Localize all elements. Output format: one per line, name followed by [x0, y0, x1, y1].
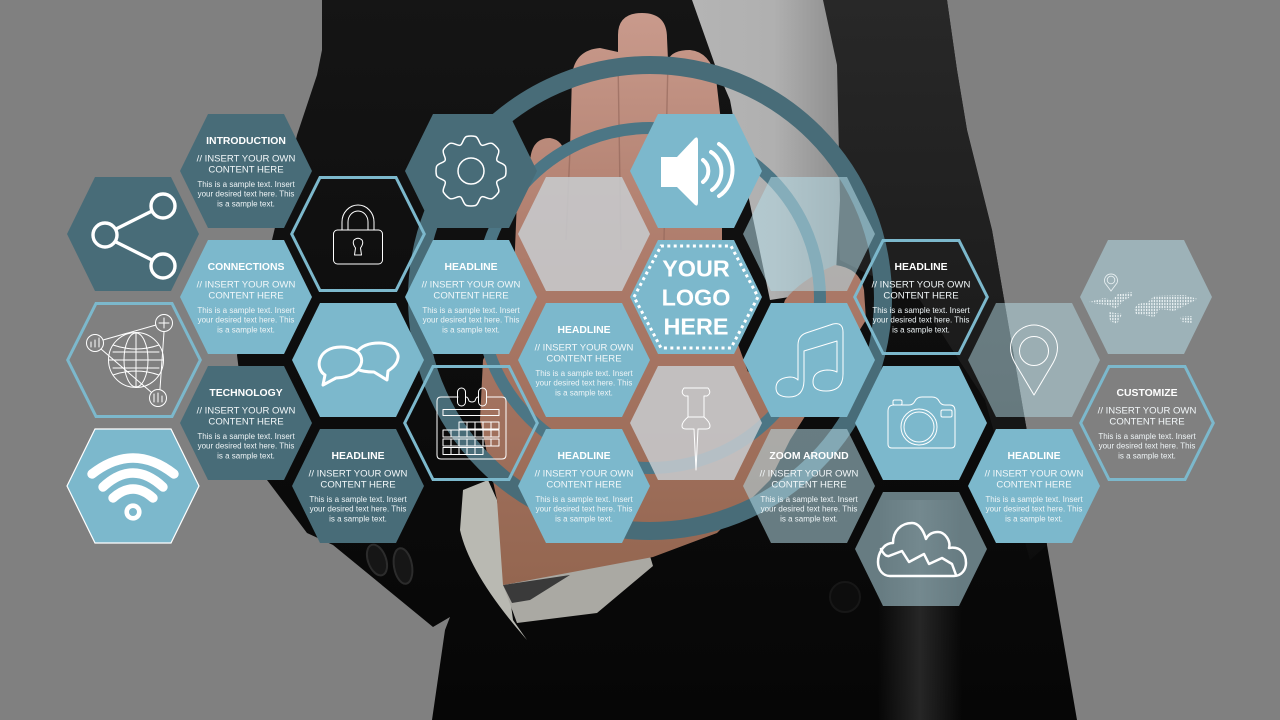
body text: your desired text here. This — [986, 505, 1082, 514]
body text: is a sample text. — [217, 199, 275, 208]
hexagon: headline 6 — [968, 429, 1100, 543]
body text: your desired text here. This — [873, 316, 969, 325]
hexagon: blank translucent left — [518, 177, 650, 291]
subheading: CONTENT HERE — [996, 480, 1072, 490]
body text: your desired text here. This — [536, 505, 632, 514]
hexagon: introduction — [180, 114, 312, 228]
hexagon: headline 4 — [518, 429, 650, 543]
subheading: CONTENT HERE — [883, 290, 959, 302]
body text: your desired text here. This — [198, 442, 294, 451]
body text: This is a sample text. Insert — [309, 495, 407, 504]
subheading: CONTENT HERE — [208, 164, 284, 176]
subheading: CONTENT HERE — [320, 480, 396, 490]
subheading: // INSERT YOUR OWN — [197, 406, 295, 416]
body text: is a sample text. — [217, 451, 275, 460]
hexagon: music — [743, 303, 875, 417]
hexagon: gear — [405, 114, 537, 228]
hexagon: customize outlined — [1081, 366, 1213, 480]
body text: This is a sample text. Insert — [535, 369, 633, 378]
icon: lock — [334, 205, 382, 264]
icon: wifi — [92, 458, 174, 518]
body text: is a sample text. — [555, 388, 613, 397]
icon: cloud — [878, 523, 966, 576]
hexagon: chat — [292, 303, 424, 417]
hexagon: headline 1 — [292, 429, 424, 543]
heading: HEADLINE — [331, 451, 385, 462]
heading: ZOOM AROUND — [769, 451, 849, 462]
body text: is a sample text. — [329, 514, 387, 523]
subheading: // INSERT YOUR OWN — [535, 468, 633, 480]
heading: HEADLINE — [444, 262, 498, 273]
body text: your desired text here. This — [198, 190, 294, 199]
icon: dotted world map with pin — [1089, 274, 1198, 324]
heading: CONNECTIONS — [208, 262, 284, 273]
icon: camera — [888, 397, 955, 448]
subheading: CONTENT HERE — [208, 416, 284, 428]
subheading: CONTENT HERE — [1109, 416, 1185, 428]
body text: your desired text here. This — [423, 316, 519, 325]
hexagon: camera — [855, 366, 987, 480]
hexagon: wifi — [67, 429, 199, 543]
body text: This is a sample text. Insert — [760, 495, 858, 504]
hexagon: zoom around — [743, 429, 875, 543]
icon: music note — [776, 324, 843, 397]
icon: chat bubbles — [319, 343, 398, 385]
subheading: CONTENT HERE — [208, 290, 284, 302]
logo text: HERE — [664, 314, 728, 340]
icon: share — [93, 194, 175, 278]
heading: TECHNOLOGY — [209, 388, 283, 399]
body text: This is a sample text. Insert — [197, 432, 295, 441]
icon: calendar — [437, 388, 506, 459]
body text: your desired text here. This — [310, 505, 406, 514]
hexagon: share icon — [67, 177, 199, 291]
body text: is a sample text. — [555, 514, 613, 523]
subheading: // INSERT YOUR OWN — [872, 280, 970, 290]
subheading: CONTENT HERE — [771, 480, 847, 490]
heading: CUSTOMIZE — [1116, 388, 1178, 399]
dotted border — [634, 246, 758, 348]
body text: is a sample text. — [892, 325, 950, 334]
hexagon: logo — [630, 240, 762, 354]
subheading: // INSERT YOUR OWN — [309, 468, 407, 480]
heading: INTRODUCTION — [206, 136, 286, 147]
heading: HEADLINE — [1007, 451, 1061, 462]
hexagon: blank translucent right — [743, 177, 875, 291]
subheading: CONTENT HERE — [433, 290, 509, 302]
subheading: // INSERT YOUR OWN — [760, 468, 858, 480]
logo text: LOGO — [662, 284, 730, 310]
hexagon: pushpin — [630, 366, 762, 480]
subheading: CONTENT HERE — [546, 354, 622, 364]
hexagon: technology — [180, 366, 312, 480]
body text: your desired text here. This — [536, 379, 632, 388]
outer ring — [417, 65, 883, 531]
body text: This is a sample text. Insert — [197, 306, 295, 315]
hexagon: cloud — [855, 492, 987, 606]
icon: pushpin — [682, 388, 710, 470]
body text: This is a sample text. Insert — [872, 306, 970, 315]
hexagon: headline 3 — [518, 303, 650, 417]
hexagon: globe network — [68, 304, 200, 416]
body text: This is a sample text. Insert — [535, 495, 633, 504]
heading: HEADLINE — [557, 325, 611, 336]
subheading: // INSERT YOUR OWN — [985, 468, 1083, 480]
icon: globe network — [86, 314, 172, 406]
hexagon: calendar — [405, 366, 537, 480]
hexagon: world map — [1080, 240, 1212, 354]
hexagon: headline 2 — [405, 240, 537, 354]
heading: HEADLINE — [557, 451, 611, 462]
subheading: // INSERT YOUR OWN — [422, 280, 520, 290]
body text: This is a sample text. Insert — [422, 306, 520, 315]
subheading: // INSERT YOUR OWN — [535, 342, 633, 354]
body text: your desired text here. This — [1099, 442, 1195, 451]
heading: HEADLINE — [894, 262, 948, 273]
body text: is a sample text. — [217, 325, 275, 334]
subheading: // INSERT YOUR OWN — [197, 280, 295, 290]
hexagon: lock — [292, 178, 424, 290]
inner ring — [480, 128, 820, 468]
hexagon: speaker — [630, 114, 762, 228]
icon: speaker — [661, 137, 733, 206]
subheading: // INSERT YOUR OWN — [1098, 406, 1196, 416]
body text: is a sample text. — [1005, 514, 1063, 523]
body text: your desired text here. This — [761, 505, 857, 514]
body text: This is a sample text. Insert — [1098, 432, 1196, 441]
hexagon: location pin — [968, 303, 1100, 417]
icon: location pin — [1011, 325, 1057, 395]
subheading: CONTENT HERE — [546, 480, 622, 490]
body text: is a sample text. — [780, 514, 838, 523]
logo text: YOUR — [662, 256, 730, 282]
body text: is a sample text. — [442, 325, 500, 334]
hexagon: headline 5 outlined — [855, 240, 987, 354]
icon: gear — [436, 136, 506, 206]
body text: your desired text here. This — [198, 316, 294, 325]
hexagon: connections — [180, 240, 312, 354]
body text: This is a sample text. Insert — [197, 180, 295, 189]
body text: This is a sample text. Insert — [985, 495, 1083, 504]
body text: is a sample text. — [1118, 451, 1176, 460]
subheading: // INSERT YOUR OWN — [197, 154, 295, 164]
